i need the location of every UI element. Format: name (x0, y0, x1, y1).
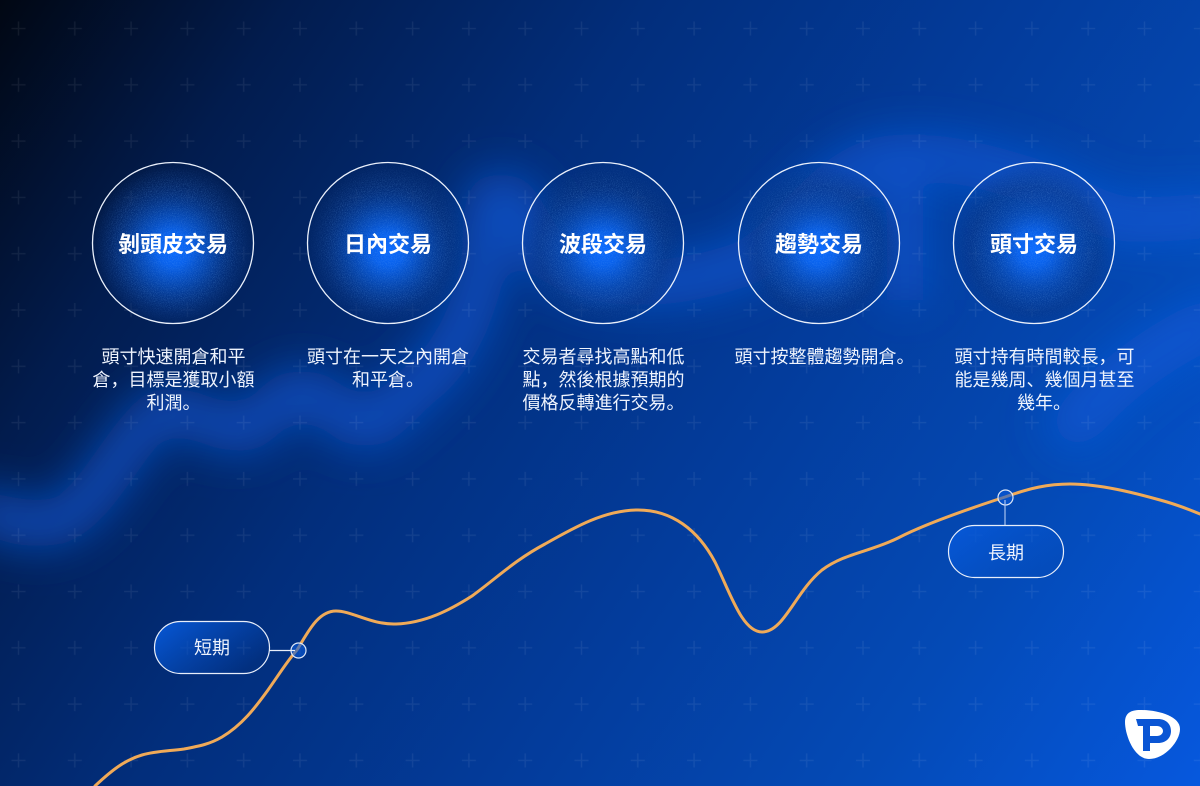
label: long term: 長期 (988, 543, 1024, 563)
description: swing trading: 價格反轉進行交易。 (522, 393, 684, 413)
heading: trend trading: 趨勢交易 (775, 232, 863, 257)
logo letter (1136, 719, 1171, 751)
description: position trading (954, 347, 1134, 413)
description: position trading: 幾年。 (1017, 393, 1071, 413)
marker: short term (291, 643, 306, 658)
callout: long term (948, 490, 1064, 578)
description: position trading: 能是幾周、幾個月甚至 (954, 370, 1134, 390)
logo badge (1125, 710, 1180, 759)
circle: trend trading (738, 162, 900, 324)
description: scalping (92, 347, 254, 413)
connector: long term (1004, 500, 1006, 525)
description: scalping: 倉，目標是獲取小額 (92, 370, 254, 390)
step 3: swing trading (522, 162, 684, 413)
heading: swing trading: 波段交易 (559, 232, 647, 257)
logo (1125, 710, 1180, 759)
circle: swing trading (522, 162, 684, 324)
description: day trading: 和平倉。 (352, 370, 424, 390)
marker: long term (998, 490, 1013, 505)
step 2: day trading (307, 162, 469, 390)
heading: day trading: 日內交易 (344, 232, 432, 257)
heading: position trading: 頭寸交易 (990, 232, 1078, 257)
heading: scalping: 剝頭皮交易 (118, 232, 228, 257)
label: short term: 短期 (194, 638, 230, 658)
circle: day trading (308, 162, 468, 324)
description: day trading: 頭寸在一天之內開倉 (307, 347, 469, 367)
callout: short term (154, 622, 306, 674)
circle: position trading (954, 162, 1114, 324)
circle: scalping (92, 162, 254, 324)
blurred glow wave (0, 157, 1200, 525)
description: day trading (307, 347, 469, 390)
step 1: scalping (92, 162, 254, 413)
description: scalping: 頭寸快速開倉和平 (102, 347, 246, 367)
description: position trading: 頭寸持有時間較長，可 (954, 347, 1134, 367)
price curve (95, 484, 1200, 786)
description: scalping: 利潤。 (146, 393, 200, 413)
description: swing trading: 點，然後根據預期的 (522, 370, 684, 390)
description: swing trading: 交易者尋找高點和低 (522, 347, 684, 367)
description: swing trading (522, 347, 684, 413)
pill: long term (948, 526, 1064, 578)
step 4: trend trading (734, 162, 914, 367)
description: trend trading: 頭寸按整體趨勢開倉。 (734, 347, 914, 367)
step 5: position trading (954, 162, 1134, 413)
connector: short term (269, 650, 295, 652)
pill: short term (154, 622, 270, 674)
